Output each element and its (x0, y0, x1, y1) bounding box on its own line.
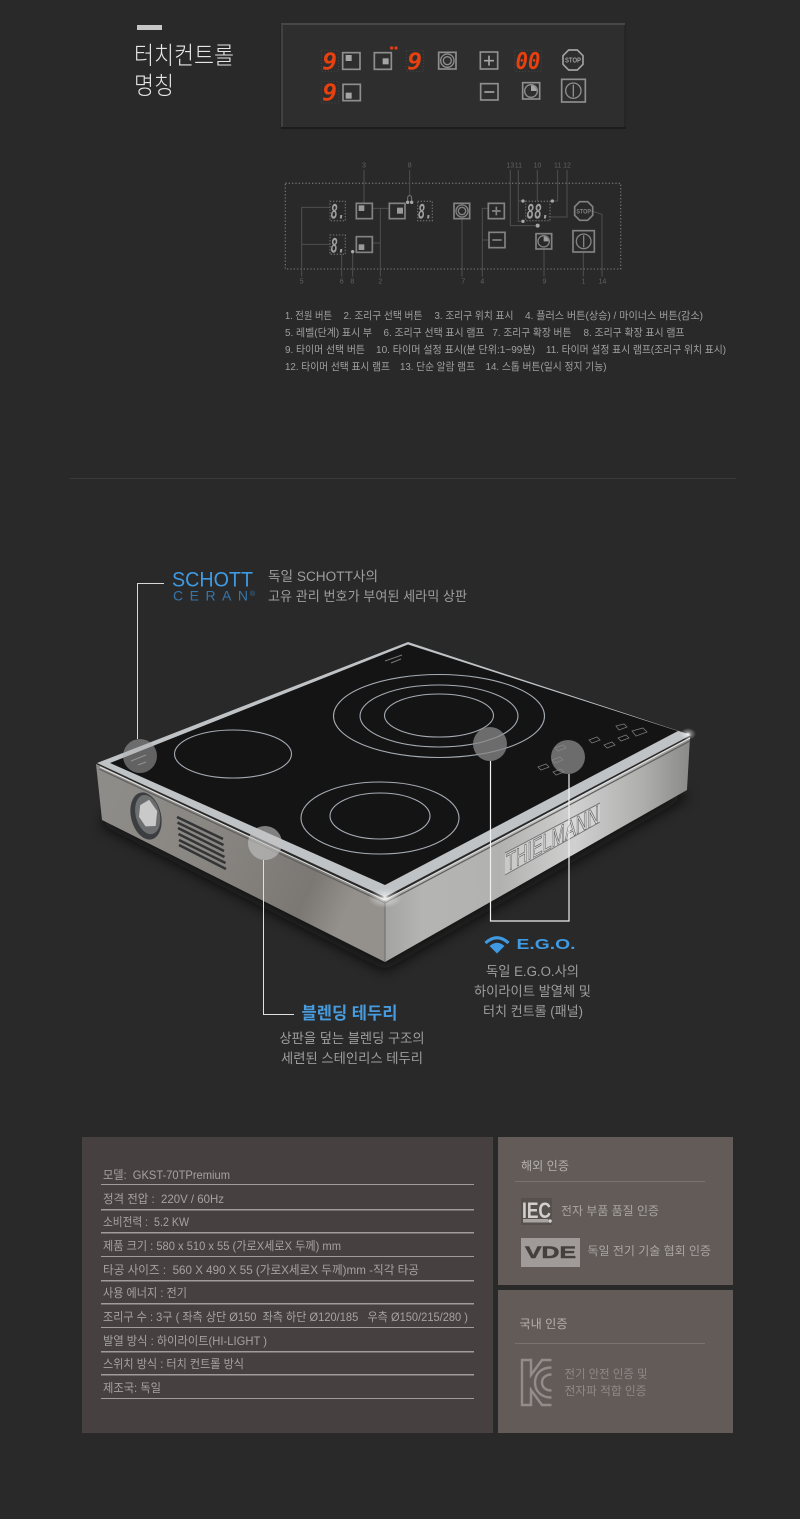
cooktop left side panel (96, 764, 385, 962)
callout: blending trim: 블렌딩 테두리 (302, 1004, 398, 1023)
cooktop corner sparkle (368, 888, 402, 908)
marker: glass logo point (123, 739, 157, 773)
button: stop: STOP (565, 57, 581, 64)
leader line: blending trim (264, 860, 294, 1014)
labels: callout numbers: 14 (598, 279, 606, 286)
legend: control names: 8. 조리구 확장 표시 램프 (584, 326, 685, 339)
legend: control names (285, 309, 726, 373)
cooktop brand plate (505, 800, 600, 878)
panel: overseas certification (498, 1137, 733, 1285)
callout: ego: 독일 E.G.O.사의 (486, 964, 579, 979)
marker: heating element point (473, 727, 507, 761)
cooktop burners (174, 674, 544, 854)
legend: control names: 13. 단순 알람 램프 (400, 360, 475, 373)
panel: domestic certification: 국내 인증 (520, 1317, 568, 1331)
callout: blending trim: 상판을 덮는 블렌딩 구조의 (280, 1031, 424, 1046)
labels: callout numbers (300, 163, 606, 286)
panel: specifications: 정격 전압 : 220V / 60Hz (103, 1192, 224, 1206)
panel: control panel photo (281, 23, 626, 129)
legend: control names: 2. 조리구 선택 버튼 (344, 310, 423, 322)
labels: callout numbers: 1 (581, 279, 585, 286)
labels: callout numbers: 2 (378, 279, 382, 286)
leader line: ego (490, 761, 569, 921)
cooktop glass logos (131, 655, 402, 765)
diagram: numbered control layout (285, 163, 621, 286)
labels: callout numbers: 7 (461, 279, 465, 286)
digit: level display 2 (418, 201, 432, 224)
callout: schott ceran (172, 568, 467, 604)
digit: level display right: 9 (407, 49, 422, 75)
legend: control names: 9. 타이머 선택 버튼 (285, 344, 365, 356)
labels: callout numbers: 9 (542, 279, 546, 286)
callout: ego: 하이라이트 발열체 및 (474, 984, 591, 999)
callout: schott ceran: 독일 SCHOTT사의 (268, 569, 378, 584)
labels: callout numbers: 10 (533, 163, 541, 170)
section: touch control heading: 명칭 (134, 73, 174, 100)
legend: control names: 6. 조리구 선택 표시 램프 (384, 327, 485, 339)
button: plus (480, 52, 498, 69)
button: burner select 3 (356, 237, 372, 252)
digit: level display 1 (330, 201, 345, 224)
labels: callout numbers: 4 (480, 279, 484, 286)
digit: level display 1: 8. (331, 201, 345, 224)
icon: ego wifi mark (486, 938, 508, 954)
panel: domestic certification (498, 1290, 733, 1433)
icon: KC mark (522, 1360, 552, 1405)
icon: IEC logo: IEC (522, 1198, 551, 1223)
button: minus (489, 232, 505, 248)
button: burner select bottom left (343, 84, 360, 101)
callout: ego (474, 936, 591, 1019)
panel: specifications: 사용 에너지 : 전기 (103, 1286, 187, 1300)
legend: control names: 10. 타이머 설정 표시(분 단위:1~99분) (376, 343, 535, 356)
labels: callout numbers: 3 (362, 163, 366, 170)
digit: level display 3: 8. (331, 234, 345, 257)
legend: control names: 14. 스톱 버튼(일시 정지 기능) (486, 360, 606, 373)
leader line: schott (138, 584, 164, 739)
section: touch control heading (134, 25, 234, 100)
callout: schott ceran: CERAN (173, 588, 248, 604)
digit: level display bottom left: 9 (322, 80, 337, 106)
button: timer (523, 83, 540, 99)
panel: overseas certification: 해외 인증 (521, 1159, 569, 1173)
panel: specifications: 제품 크기 : 580 x 510 x 55 (가로X세로X 두께) mm (103, 1239, 341, 1253)
cooktop touch icons (538, 724, 647, 775)
button: burner select right (374, 53, 391, 69)
digit: level display 3 (330, 234, 345, 257)
labels: callout numbers: 13 (506, 163, 514, 170)
cooktop brand plate: THIELMANN (506, 800, 599, 878)
callout: ego: E.G.O. (516, 936, 576, 953)
panel: specifications: 제조국: 독일 (103, 1381, 161, 1395)
legend: control names: 11. 타이머 설정 표시 램프(조리구 위치 표시) (546, 343, 726, 356)
button: stop (575, 202, 593, 220)
panel: specifications: 모델: GKST-70TPremium (103, 1168, 230, 1182)
panel: specifications: 타공 사이즈 : 560 X 490 X 55 (가로X세로X 두께)mm -직각 타공 (103, 1263, 419, 1277)
labels: callout numbers: 8 (350, 279, 354, 286)
panel: specifications: 조리구 수 : 3구 ( 좌측 상단 Ø150 좌측 하단 Ø120/185 우측 Ø150/215/280 ) (103, 1310, 468, 1324)
illustration: cooktop (96, 642, 696, 970)
lamps: timer indicator dots (351, 199, 554, 253)
panel: domestic certification: 전기 안전 인증 및 (564, 1367, 648, 1381)
panel: specifications: 발열 방식 : 하이라이트(HI-LIGHT ) (103, 1334, 267, 1348)
labels: callout numbers: 5 (300, 279, 304, 286)
icon: VDE logo: VDE (525, 1243, 576, 1262)
legend: control names: 7. 조리구 확장 버튼 (492, 326, 572, 339)
legend: control names: 1. 전원 버튼 (285, 310, 332, 322)
button: burner extension (439, 52, 456, 69)
marker: touch panel point (551, 740, 585, 774)
legend: control names: 5. 레벨(단계) 표시 부 (285, 327, 372, 339)
cooktop glass top (110, 644, 678, 885)
button: stop (563, 50, 583, 70)
section: touch control heading: 터치컨트롤 (134, 42, 234, 70)
panel: domestic certification: 전자파 적합 인증 (564, 1384, 646, 1398)
panel: specifications: 스위치 방식 : 터치 컨트롤 방식 (103, 1357, 244, 1371)
panel: specifications: 소비전력 : 5.2 KW (103, 1215, 190, 1229)
cooktop right side panel (385, 737, 690, 962)
panel: specifications (82, 1137, 493, 1433)
legend: control names: 12. 타이머 선택 표시 램프 (285, 361, 390, 373)
button: timer (536, 234, 552, 249)
lamps: extension indicator dots (406, 201, 413, 204)
callout: schott ceran: ® (250, 590, 256, 598)
cooktop frame (97, 642, 691, 897)
labels: callout numbers: 11 (515, 163, 522, 170)
labels: callout numbers: 12 (563, 163, 571, 170)
digit: timer display (526, 201, 550, 224)
digit: timer display: 88. (527, 201, 549, 224)
button: burner select 2 (389, 203, 405, 219)
callout: ego: 터치 컨트롤 (패널) (483, 1004, 583, 1019)
button: minus (481, 84, 498, 100)
callout: blending trim: 세련된 스테인리스 테두리 (281, 1051, 423, 1066)
callout: schott ceran: SCHOTT (172, 568, 253, 592)
callout: blending trim (280, 1004, 424, 1066)
button: power (562, 79, 585, 102)
button: power (573, 231, 594, 252)
button: stop: STOP (576, 208, 591, 215)
button: plus (488, 203, 504, 219)
button: burner select top left (343, 53, 360, 69)
cooktop side lock knob (126, 789, 166, 843)
icon: VDE logo (521, 1238, 580, 1267)
panel: overseas certification: 전자 부품 품질 인증 (561, 1204, 659, 1218)
cooktop side vents (177, 817, 226, 869)
digit: level display top left: 9 (322, 49, 337, 75)
legend: control names: 4. 플러스 버튼(상승) / 마이너스 버튼(감소) (525, 310, 703, 322)
lamps: red dots (390, 46, 398, 50)
callout: schott ceran: 고유 관리 번호가 부여된 세라믹 상판 (268, 589, 467, 604)
panel: overseas certification: 독일 전기 기술 협회 인증 (588, 1244, 711, 1258)
button: burner extension (454, 203, 470, 219)
button: burner select 1 (356, 203, 372, 219)
labels: callout numbers: 11 (554, 163, 561, 170)
digit: timer display: 00 (516, 49, 540, 75)
marker: blending trim point (248, 826, 282, 860)
digit: level display 2: 8. (418, 201, 432, 224)
legend: control names: 3. 조리구 위치 표시 (434, 309, 514, 322)
labels: callout numbers: 6 (340, 279, 344, 286)
labels: callout numbers: 8 (408, 163, 412, 170)
